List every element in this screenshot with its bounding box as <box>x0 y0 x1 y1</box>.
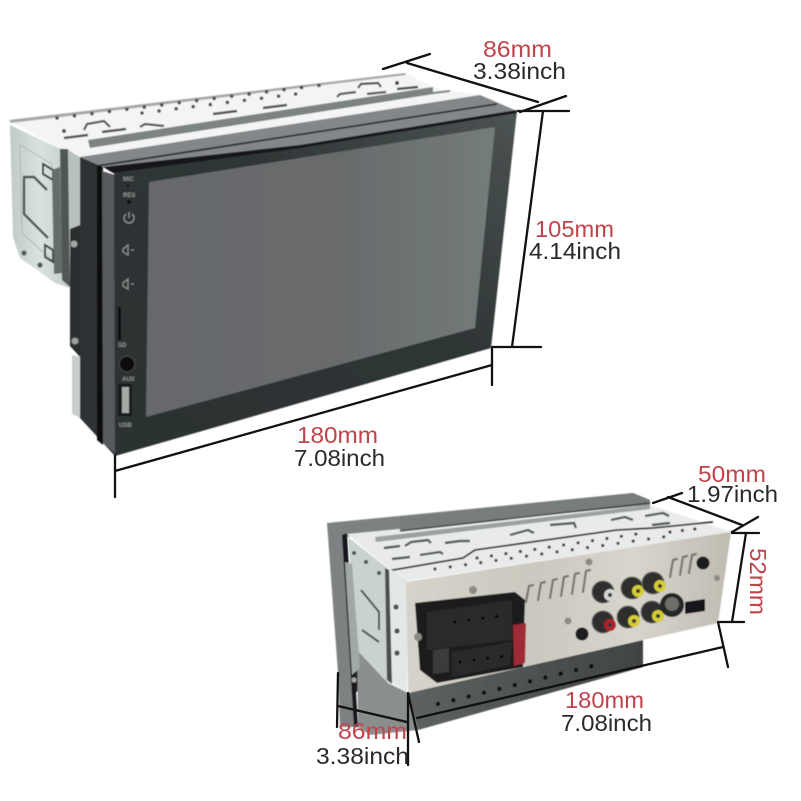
label: width 180mm rear <box>561 687 652 736</box>
device: rear view of car stereo <box>327 493 732 735</box>
label AUX: AUX <box>122 377 135 383</box>
label USB: USB <box>119 423 132 429</box>
label: height 105mm: 4.14inch <box>529 238 621 264</box>
icon: volume down <box>123 279 134 289</box>
front outer frame <box>80 157 115 456</box>
USB port <box>118 384 132 416</box>
label: depth 50mm: 1.97inch <box>687 481 778 507</box>
label: depth 86mm front <box>473 36 566 84</box>
SD card slot <box>118 307 121 340</box>
label: depth 86mm front: 3.38inch <box>473 58 566 84</box>
dimension lines: front view <box>115 54 569 497</box>
dimension lines: rear view <box>337 493 759 765</box>
label: width 180mm front: 7.08inch <box>294 445 385 471</box>
chassis rail <box>88 87 450 148</box>
underside panel left <box>357 650 418 735</box>
label: width 180mm rear: 7.08inch <box>561 710 652 736</box>
icon: volume up <box>123 245 134 255</box>
chassis side <box>345 537 407 693</box>
underside panel with holes <box>408 640 643 730</box>
label: depth 86mm front: 86mm <box>483 36 552 62</box>
rear plate <box>406 532 731 693</box>
label MIC: MIC <box>123 177 135 183</box>
label: width 180mm rear: 180mm <box>565 687 644 713</box>
chassis top <box>347 493 732 581</box>
RCA sockets <box>592 572 666 633</box>
front bezel top strip <box>80 95 517 167</box>
icon: power <box>124 212 134 223</box>
label: height 105mm: 105mm <box>535 216 614 242</box>
wiring harness connector <box>414 586 526 683</box>
red fuse <box>513 623 526 666</box>
label: depth 86mm rear: 3.38inch <box>316 743 409 769</box>
label: depth 50mm <box>687 461 778 507</box>
touch screen <box>146 127 495 417</box>
label: height 105mm <box>529 216 621 264</box>
chassis top with ventilation holes <box>9 73 480 157</box>
label: width 180mm front: 180mm <box>297 422 378 448</box>
AUX jack <box>119 356 135 372</box>
plate vent fins <box>526 554 696 602</box>
label RES: RES <box>123 193 135 199</box>
rear ports and screws <box>564 556 720 640</box>
label: width 180mm front <box>294 422 385 471</box>
label: depth 50mm: 50mm <box>698 461 766 487</box>
label: height 52mm: 52mm <box>745 548 771 615</box>
front bezel <box>114 111 517 456</box>
label: depth 86mm rear <box>316 718 409 769</box>
chassis side panel <box>10 125 80 288</box>
front panel controls <box>118 177 135 429</box>
device: front view of car stereo <box>9 73 517 456</box>
left mounting ear with screws <box>70 225 80 418</box>
label SD: SD <box>118 343 127 349</box>
label: depth 86mm rear: 86mm <box>338 718 407 744</box>
front casing behind chassis <box>327 493 650 727</box>
